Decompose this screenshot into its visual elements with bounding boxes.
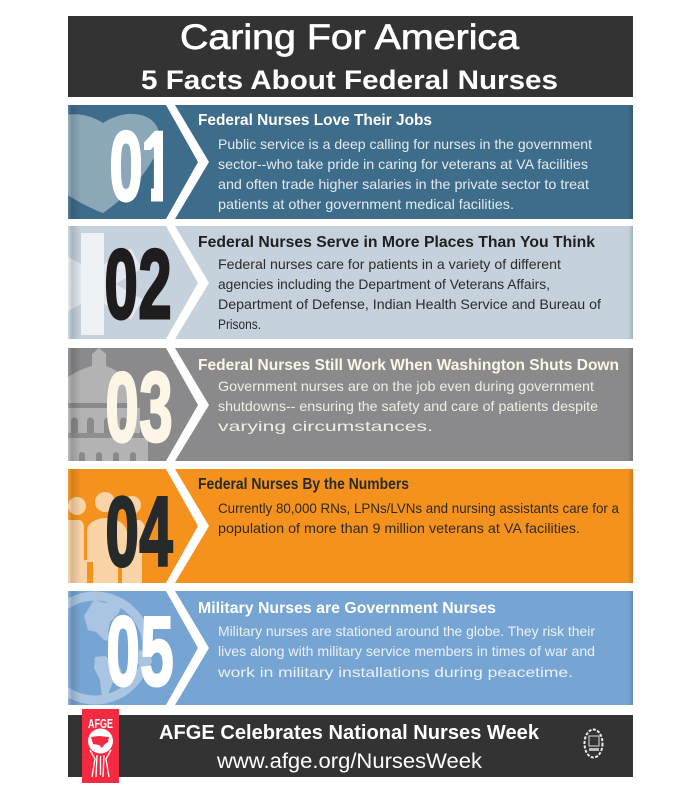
chevron xyxy=(166,226,209,339)
number 03: 03 xyxy=(106,354,173,463)
chevron xyxy=(166,105,209,219)
body text: Public service is a deep calling for nurses in the government xyxy=(218,136,592,152)
panel: fact 3 xyxy=(60,348,633,463)
body text: Military nurses are stationed around the globe. They risk their xyxy=(218,623,595,639)
seal xyxy=(584,730,602,758)
body text: work in military installations during peacetime. xyxy=(217,664,573,680)
icon: heart xyxy=(60,114,160,213)
panel: fact 5 xyxy=(43,591,633,707)
body text: and often trade higher salaries in the private sector to treat xyxy=(218,176,589,192)
body text: Government nurses are on the job even during government xyxy=(218,378,594,394)
number 01: 01 xyxy=(110,113,173,222)
body text: patients at other government medical facilities. xyxy=(218,196,514,212)
heading: Federal Nurses Love Their Jobs xyxy=(198,112,432,129)
logo: AFGE: AFGE xyxy=(88,716,113,731)
number 04: 04 xyxy=(106,479,173,587)
body text xyxy=(218,378,598,434)
body text: lives along with military service members in times of war and xyxy=(218,643,595,659)
body text: agencies including the Department of Veterans Affairs, xyxy=(218,276,550,292)
icon: capitol building xyxy=(60,348,148,461)
number 05: 05 xyxy=(106,598,174,707)
body text: sector--who take pride in caring for veterans at VA facilities xyxy=(218,156,588,172)
body text: Department of Defense, Indian Health Service and Bureau of xyxy=(218,296,601,312)
body text: Currently 80,000 RNs, LPNs/LVNs and nursing assistants care for a xyxy=(218,500,619,516)
heading: Federal Nurses Serve in More Places Than You Think xyxy=(198,234,595,251)
logo: AFGE xyxy=(82,709,119,783)
footer heading: AFGE Celebrates National Nurses Week xyxy=(159,722,540,744)
body text: Federal nurses care for patients in a variety of different xyxy=(218,256,561,272)
body text xyxy=(218,136,592,212)
panel: fact 4 xyxy=(60,469,633,587)
footer banner xyxy=(68,709,633,783)
title: Caring For America xyxy=(180,18,520,57)
infographic xyxy=(68,16,633,783)
footer url: www.afge.org/NursesWeek xyxy=(216,750,483,773)
number 02: 02 xyxy=(104,231,172,340)
body text xyxy=(218,256,601,332)
icon: star of life xyxy=(68,233,142,335)
body text: shutdowns-- ensuring the safety and care of patients despite xyxy=(218,398,598,414)
body text: varying circumstances. xyxy=(218,418,433,434)
panel: fact 1 xyxy=(60,105,633,222)
icon: group of people xyxy=(68,492,145,583)
heading: Federal Nurses By the Numbers xyxy=(198,476,409,493)
panel: fact 2 xyxy=(43,226,633,340)
body text xyxy=(217,623,595,680)
body text xyxy=(218,500,619,536)
body text: population of more than 9 million veterans at VA facilities. xyxy=(218,520,580,536)
chevron xyxy=(166,591,209,705)
heading: Federal Nurses Still Work When Washington Shuts Down xyxy=(198,357,619,374)
body text: Prisons. xyxy=(218,316,261,332)
heading: Military Nurses are Government Nurses xyxy=(198,600,496,617)
chevron xyxy=(166,469,209,583)
chevron xyxy=(166,348,209,461)
icon: globe xyxy=(68,592,152,704)
header banner xyxy=(68,16,633,97)
subtitle: 5 Facts About Federal Nurses xyxy=(141,65,558,95)
